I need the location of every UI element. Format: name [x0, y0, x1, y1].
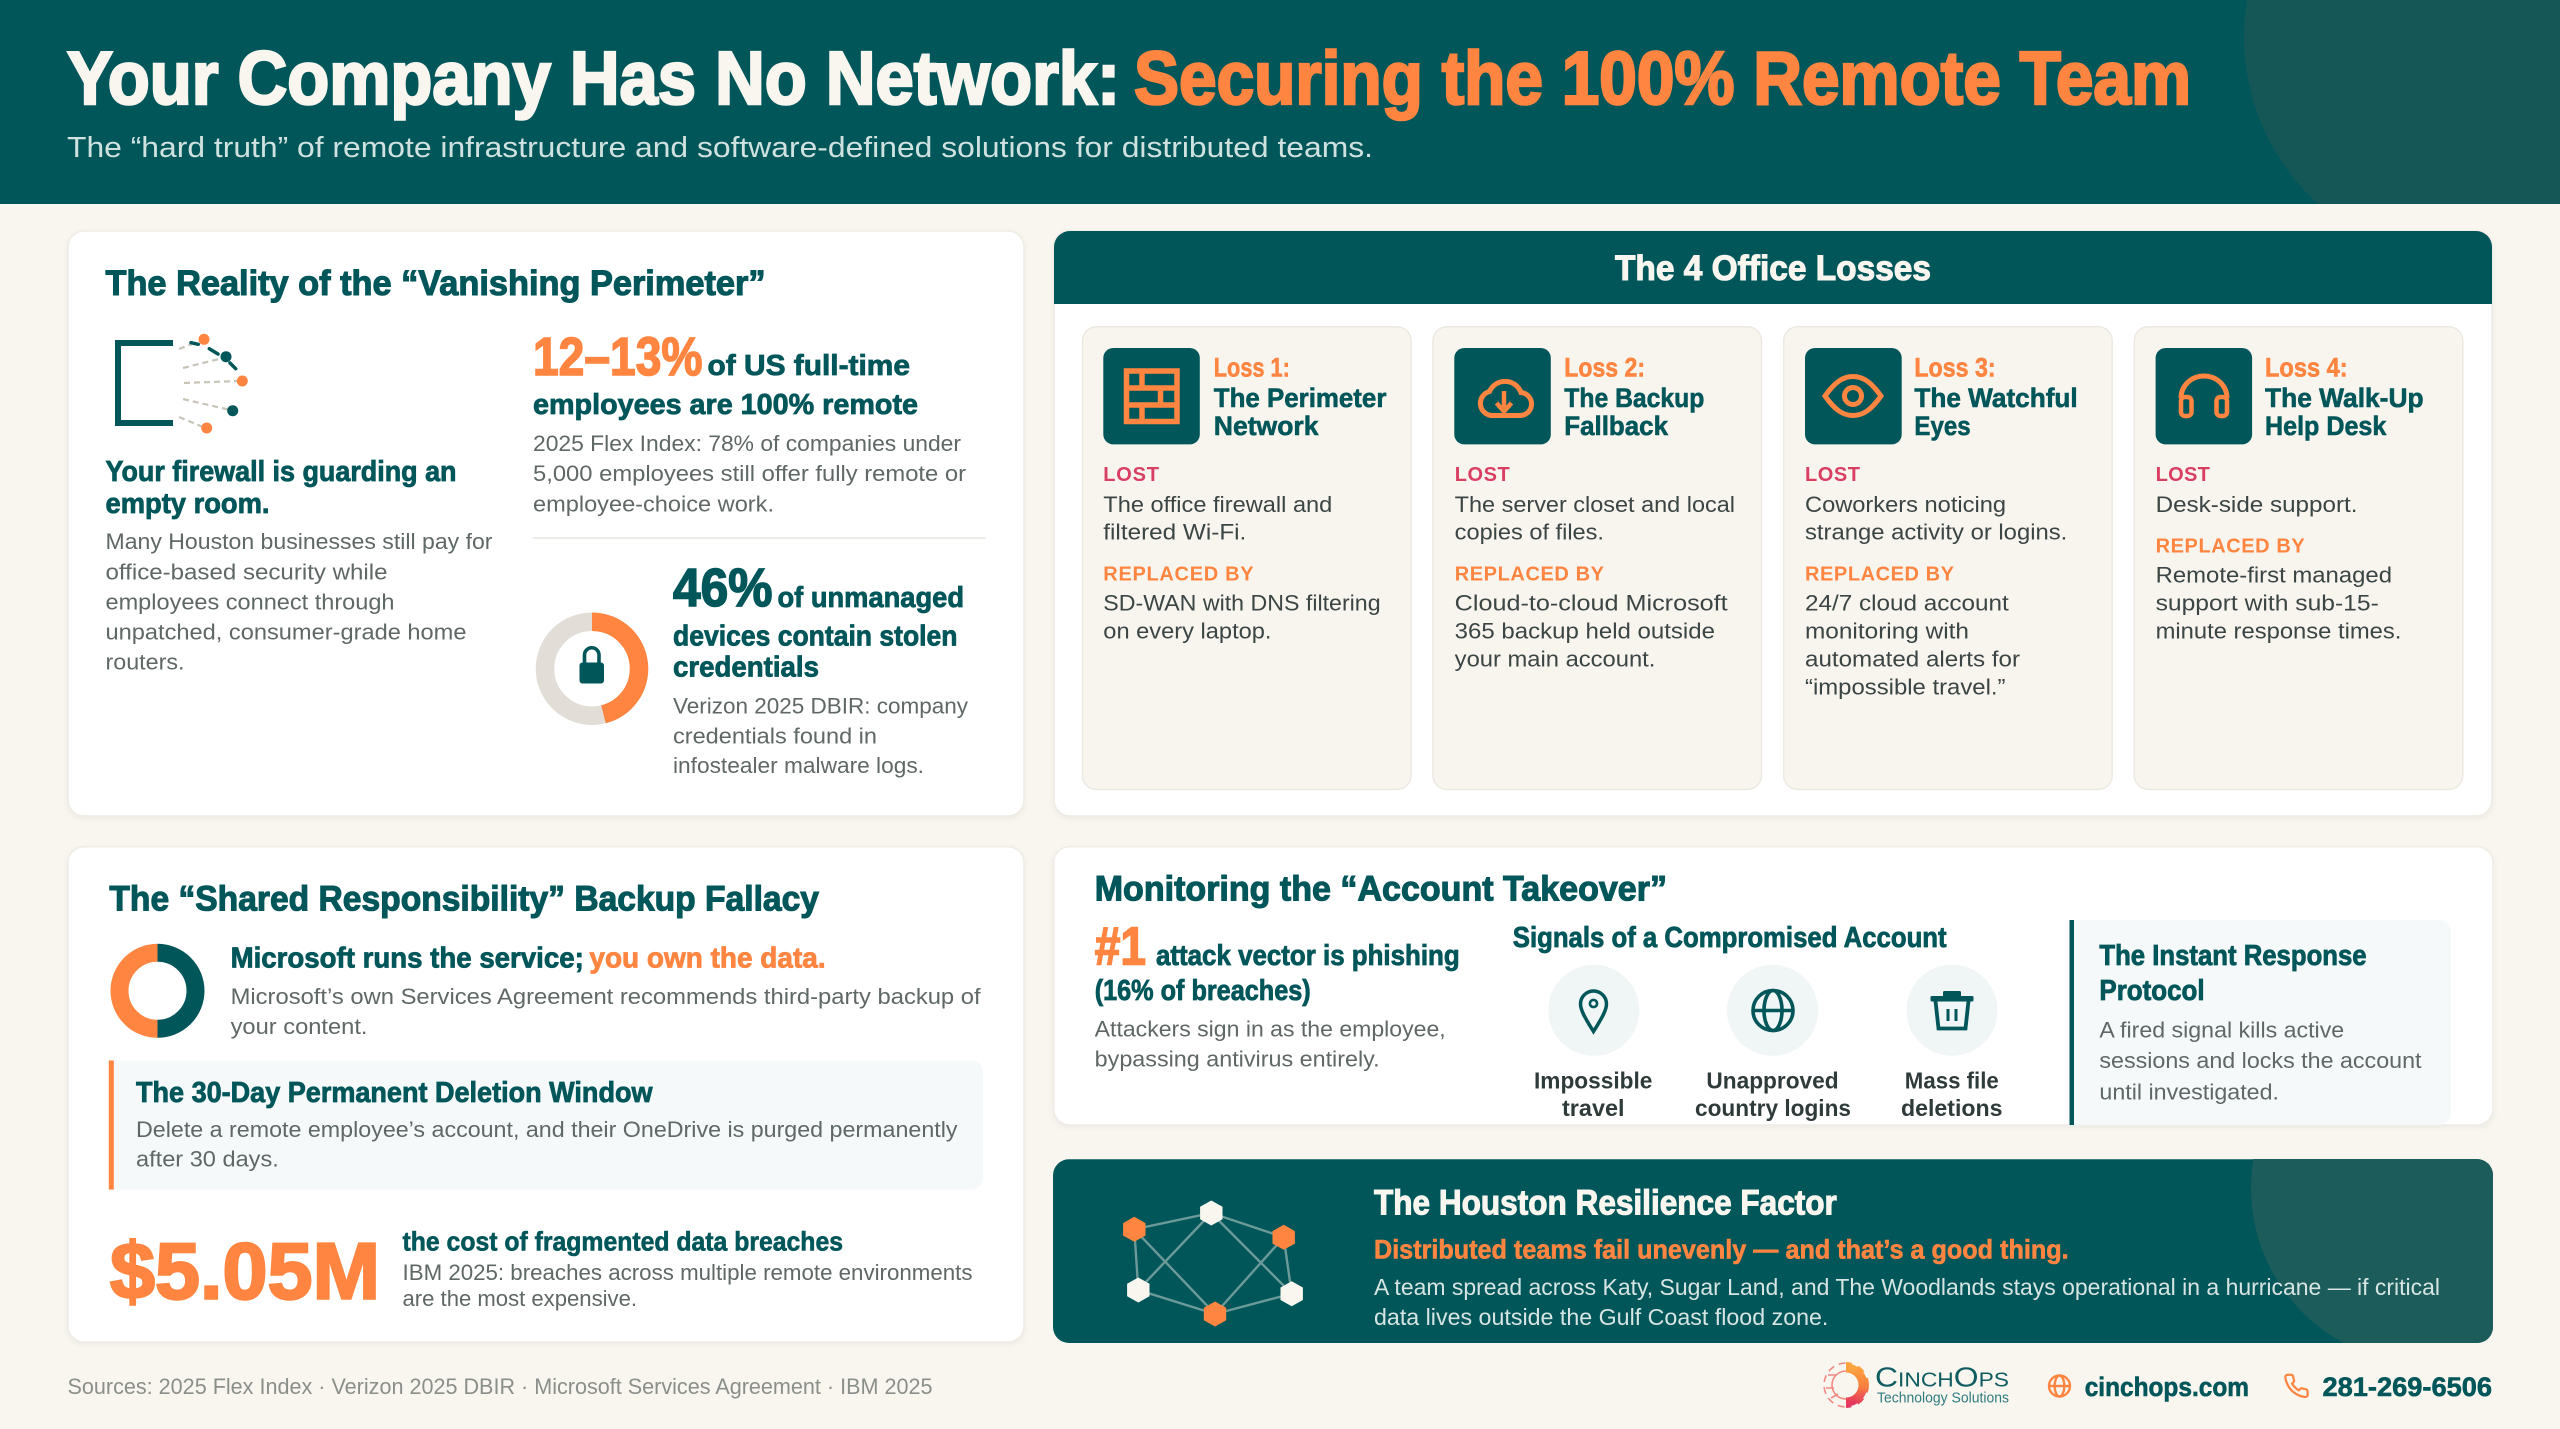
lost [1455, 464, 1735, 545]
title: Securing the 100% Remote Team [1134, 36, 2191, 120]
replaced by: support with sub-15- [2156, 590, 2379, 615]
text block: microsoft runs the service [231, 943, 981, 1039]
replaced by: REPLACED BY [1103, 564, 1254, 586]
lost: The server closet and local [1455, 492, 1735, 517]
replaced by [1455, 564, 1729, 671]
replaced by [1103, 564, 1381, 644]
stat: #1 attack vector [1095, 916, 1460, 1072]
stat: 46% stolen credentials: infostealer malware logs. [673, 753, 924, 778]
text block: microsoft runs the service: Microsoft’s own Services Agreement recommends third-party backup of [231, 984, 981, 1009]
icon: headset [2156, 348, 2252, 444]
stat: 12-13% remote: employees are 100% remote [533, 389, 918, 421]
logo: cinchops: Technology Solutions [1877, 1390, 2009, 1407]
replaced by: your main account. [1455, 646, 1655, 671]
subhead: distributed teams: Distributed teams fail unevenly — and that’s a good thing. [1374, 1234, 2069, 1264]
lost: LOST [2156, 464, 2210, 486]
card title: The Backup [1564, 383, 1704, 413]
icon: resilient mesh network [1123, 1200, 1303, 1326]
signal: unapproved country logins [1695, 965, 1851, 1121]
heading: backup fallacy: The “Shared Responsibility” Backup Fallacy [109, 880, 820, 918]
signal: mass file deletions: deletions [1901, 1095, 2002, 1121]
replaced by [1805, 564, 2021, 700]
card title: The Walk-Up [2265, 383, 2424, 413]
signal: mass file deletions [1901, 965, 2002, 1121]
stat: #1 attack vector: Attackers sign in as the employee, [1095, 1017, 1446, 1042]
stat: $5.05M: IBM 2025: breaches across multiple remote environments [402, 1260, 972, 1285]
replaced by: REPLACED BY [1805, 564, 1955, 586]
replaced by: on every laptop. [1103, 619, 1272, 644]
lost: LOST [1103, 464, 1159, 486]
card title: Eyes [1914, 411, 1971, 441]
callout: instant response protocol: A fired signal kills active [2099, 1018, 2344, 1042]
replaced by: minute response times. [2156, 619, 2401, 644]
callout: 30-day deletion window: The 30-Day Permanent Deletion Window [136, 1077, 653, 1109]
phone: 281-269-6506 [2322, 1372, 2492, 1402]
card title: The Perimeter [1214, 383, 1387, 413]
stat: 46% stolen credentials: credentials [673, 652, 819, 684]
panel: monitoring the account takeover [1054, 847, 2493, 1125]
signal: unapproved country logins: Unapproved [1706, 1067, 1839, 1093]
stat: 46% stolen credentials: Verizon 2025 DBIR: company [673, 694, 969, 718]
stat: #1 attack vector: #1 [1095, 916, 1146, 976]
card title [2265, 353, 2424, 441]
replaced by: monitoring with [1805, 619, 1969, 644]
title [67, 36, 2191, 120]
card title: Loss 3: [1914, 353, 1996, 383]
heading: account takeover: Monitoring the “Account Takeover” [1095, 870, 1667, 909]
lost [1103, 464, 1332, 545]
callout: instant response protocol: sessions and locks the account [2099, 1048, 2422, 1073]
logo: cinchops [1824, 1362, 2009, 1407]
text block: firewall guarding empty room: office-based security while [106, 560, 388, 584]
callout: instant response protocol [2070, 920, 2451, 1125]
card: loss 4 [2134, 327, 2463, 790]
replaced by: 24/7 cloud account [1805, 591, 2010, 616]
callout: instant response protocol: The Instant Response [2099, 940, 2367, 972]
card title: Loss 1: [1214, 353, 1290, 383]
panel: vanishing perimeter [68, 231, 1024, 816]
stat: 46% stolen credentials: 46% [673, 558, 772, 618]
heading: vanishing perimeter: The Reality of the “Vanishing Perimeter” [106, 264, 766, 303]
card title: Network [1214, 411, 1319, 441]
replaced by: Cloud-to-cloud Microsoft [1455, 591, 1729, 616]
card title: Loss 4: [2265, 353, 2348, 383]
text block: houston resilience body: data lives outside the Gulf Coast flood zone. [1374, 1304, 1828, 1330]
lost: Desk-side support. [2156, 492, 2358, 517]
signal: impossible travel: Impossible [1534, 1067, 1652, 1093]
stat: 46% stolen credentials: credentials found in [673, 724, 877, 748]
replaced by: Remote-first managed [2156, 562, 2392, 588]
text block: microsoft runs the service: your content. [231, 1014, 368, 1039]
icon: firewall bricks [1103, 348, 1200, 444]
stat: 46% stolen credentials: devices contain stolen [673, 620, 958, 652]
title: Your Company Has No Network: [67, 36, 1120, 120]
subtitle: The “hard truth” of remote infrastructure and software-defined solutions for distributed teams. [67, 132, 1373, 164]
icon: cloud download [1454, 348, 1551, 444]
sources: Sources: 2025 Flex Index · Verizon 2025 DBIR · Microsoft Services Agreement · IBM 2025 [68, 1374, 932, 1399]
card: loss 1 [1082, 327, 1411, 790]
stat: $5.05M: $5.05M [110, 1227, 380, 1316]
stat: $5.05M [110, 1227, 972, 1316]
text block: houston resilience body [1374, 1274, 2440, 1330]
lost: LOST [1455, 464, 1510, 486]
lost [1805, 464, 2067, 545]
heading: the 4 office losses: The 4 Office Losses [1615, 249, 1931, 288]
card title [1214, 353, 1387, 441]
website: cinchops.com [2085, 1372, 2249, 1402]
lost: LOST [1805, 464, 1860, 486]
card title: Help Desk [2265, 411, 2387, 441]
text block: firewall guarding empty room: Many Houston businesses still pay for [106, 529, 493, 554]
text block: firewall guarding empty room: empty room. [106, 488, 270, 520]
donut chart: half and half [119, 953, 196, 1029]
callout: 30-day deletion window [109, 1060, 983, 1190]
card: loss 3 [1784, 327, 2112, 790]
stat: #1 attack vector: attack vector is phishing [1156, 940, 1460, 972]
stat: $5.05M: are the most expensive. [402, 1286, 637, 1311]
lost [2156, 464, 2358, 517]
donut chart: 46% with lock icon [545, 622, 639, 716]
text block: firewall guarding empty room: Your firewall is guarding an [106, 456, 456, 488]
replaced by: SD-WAN with DNS filtering [1103, 591, 1381, 616]
callout: 30-day deletion window: Delete a remote employee’s account, and their OneDrive is purged permanently [136, 1117, 958, 1142]
stat: 12-13% remote: of US full-time [708, 350, 910, 382]
stat: #1 attack vector: bypassing antivirus entirely. [1095, 1047, 1380, 1072]
signal: unapproved country logins: country logins [1695, 1095, 1851, 1121]
callout: instant response protocol: Protocol [2099, 975, 2205, 1007]
stat: 12-13% remote: employee-choice work. [533, 492, 774, 516]
text block: houston resilience body: A team spread across Katy, Sugar Land, and The Woodlands stays operational in a hurricane — if critical [1374, 1274, 2440, 1300]
stat: 46% stolen credentials [673, 558, 969, 778]
icon: eye [1805, 348, 1902, 444]
callout: 30-day deletion window: after 30 days. [136, 1146, 279, 1171]
text block: firewall guarding empty room: unpatched, consumer-grade home [106, 620, 466, 644]
stat: 12-13% remote: 5,000 employees still offer fully remote or [533, 461, 967, 486]
text block: microsoft runs the service: you own the data. [589, 943, 826, 975]
panel: the 4 office losses [1054, 231, 2492, 816]
callout: instant response protocol: until investigated. [2099, 1079, 2279, 1104]
signal: mass file deletions: Mass file [1905, 1067, 1999, 1093]
stat: 12-13% remote: 2025 Flex Index: 78% of companies under [533, 431, 962, 456]
lost: The office firewall and [1103, 492, 1332, 517]
stat: 12-13% remote: 12–13% [533, 327, 702, 387]
text block: firewall guarding empty room: employees connect through [106, 590, 394, 614]
signal: impossible travel [1534, 965, 1652, 1121]
text block: firewall guarding empty room: routers. [106, 650, 184, 674]
heading: houston resilience factor: The Houston Resilience Factor [1374, 1183, 1837, 1222]
card title: The Watchful [1914, 383, 2078, 413]
replaced by: REPLACED BY [1455, 564, 1605, 586]
lost: Coworkers noticing [1805, 492, 2006, 517]
card: loss 2 [1433, 327, 1762, 790]
text block: firewall guarding empty room [106, 456, 493, 674]
lost: copies of files. [1455, 520, 1604, 545]
replaced by [2156, 535, 2401, 644]
lost: filtered Wi-Fi. [1103, 520, 1246, 545]
signals of a compromised account: Signals of a Compromised Account [1513, 922, 1947, 954]
replaced by: automated alerts for [1805, 646, 2021, 671]
text block: microsoft runs the service: Microsoft runs the service; [231, 943, 584, 975]
stat: $5.05M: the cost of fragmented data breaches [402, 1227, 843, 1257]
replaced by: 365 backup held outside [1455, 619, 1715, 644]
signals of a compromised account [1513, 922, 2002, 1121]
stat: 46% stolen credentials: of unmanaged [778, 582, 964, 614]
replaced by: “impossible travel.” [1805, 675, 2006, 700]
footer: logo and contact [1824, 1362, 2492, 1407]
lost: strange activity or logins. [1805, 520, 2067, 545]
stat: 12-13% remote [533, 327, 967, 516]
card title: Loss 2: [1564, 353, 1645, 383]
signal: impossible travel: travel [1562, 1095, 1624, 1121]
icon: empty firewall bracket with scattered nodes [118, 334, 248, 434]
panel: houston resilience factor [1053, 1159, 2493, 1343]
header band [0, 0, 2560, 204]
panel: shared responsibility backup fallacy [68, 847, 1024, 1342]
replaced by: REPLACED BY [2156, 535, 2305, 557]
card title [1564, 353, 1704, 441]
stat: #1 attack vector: (16% of breaches) [1095, 975, 1311, 1007]
logo: cinchops: CINCHOPS [1875, 1362, 2009, 1393]
card title: Fallback [1564, 411, 1669, 441]
card title [1914, 353, 2078, 441]
